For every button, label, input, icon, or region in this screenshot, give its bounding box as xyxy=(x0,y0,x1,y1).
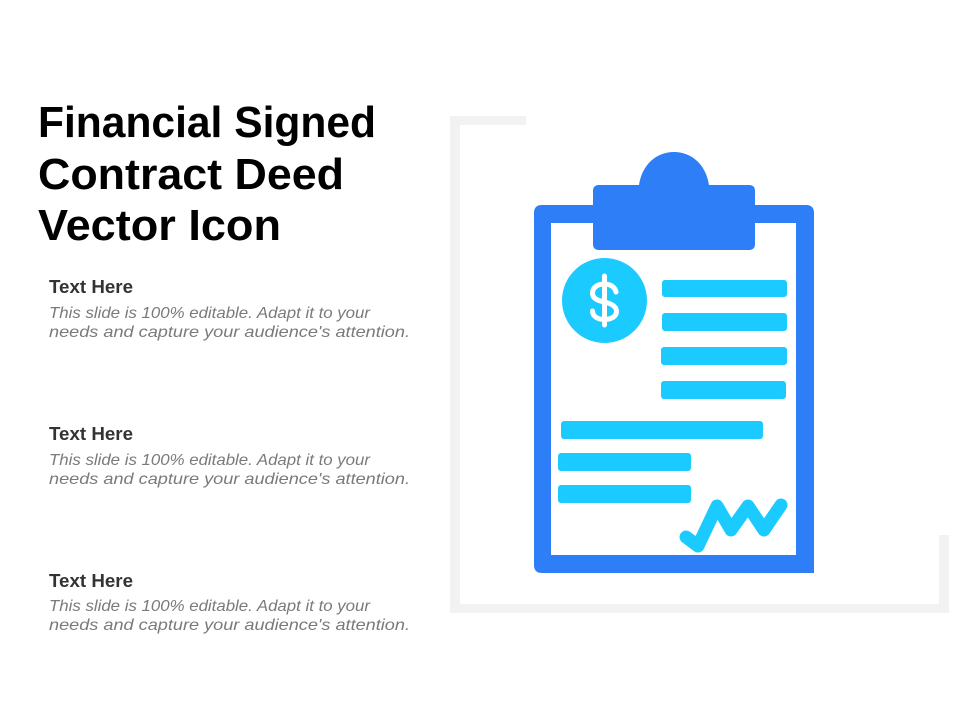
text block 1: Text Here xyxy=(49,277,133,297)
text block 2: needs and capture your audience's attention. xyxy=(49,471,410,488)
text block 3: This slide is 100% editable. Adapt it to your xyxy=(49,598,371,615)
icon: clipboard contract xyxy=(534,152,814,573)
gray corner frame xyxy=(450,116,949,613)
text lines xyxy=(558,280,787,503)
text block 3: Text Here xyxy=(49,571,133,591)
text block 1: needs and capture your audience's attention. xyxy=(49,324,410,341)
text block 2 xyxy=(49,424,410,488)
clipboard board xyxy=(534,205,814,573)
text block 1 xyxy=(49,277,410,341)
text block 3: needs and capture your audience's attention. xyxy=(49,617,410,634)
clipboard clip xyxy=(593,152,755,250)
text block 3 xyxy=(49,571,410,634)
text block 2: Text Here xyxy=(49,424,133,444)
text block 2: This slide is 100% editable. Adapt it to your xyxy=(49,452,371,469)
title: Financial Signed xyxy=(38,98,376,147)
title xyxy=(38,98,376,250)
icon: dollar coin xyxy=(562,258,647,343)
text block 1: This slide is 100% editable. Adapt it to your xyxy=(49,305,371,322)
signature xyxy=(686,505,781,546)
title: Vector Icon xyxy=(38,201,281,250)
title: Contract Deed xyxy=(38,150,344,199)
